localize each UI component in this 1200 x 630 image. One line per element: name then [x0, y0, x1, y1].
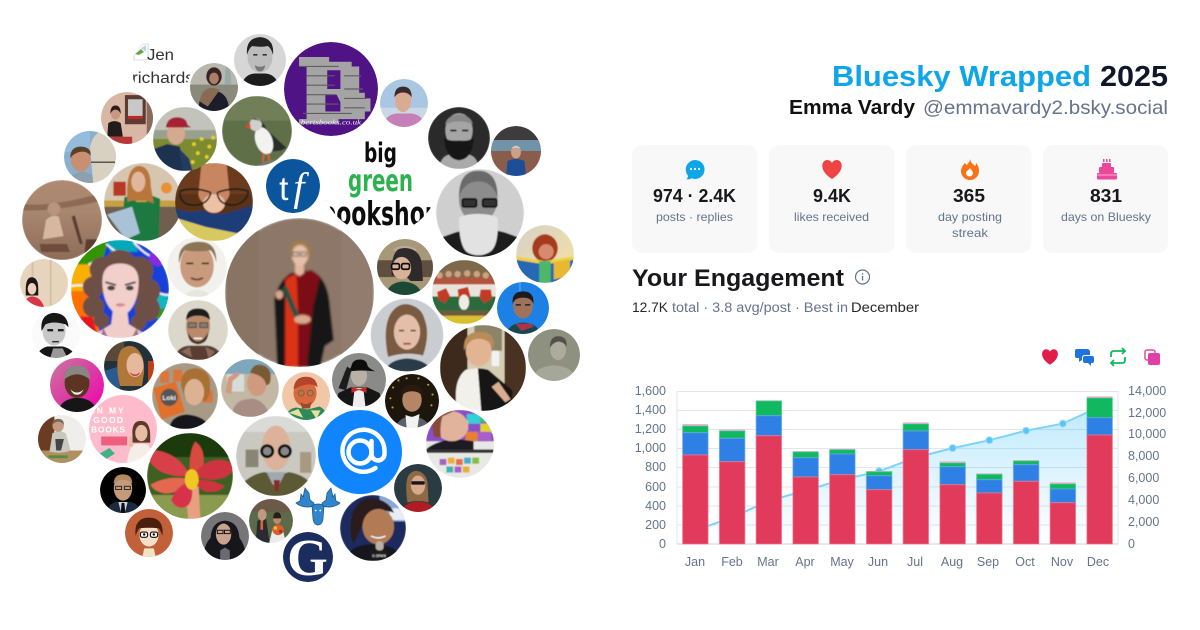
panel: days on Bluesky	[1043, 145, 1168, 253]
avatar: group with Welsh flags	[432, 260, 496, 324]
avatar: woman with colourful artwork	[426, 407, 494, 478]
month labels: Oct	[1015, 555, 1035, 569]
avatar cluster	[20, 34, 580, 587]
left axis labels: 0	[659, 537, 666, 551]
right axis labels: 14,000	[1128, 384, 1166, 398]
user name and handle: Emma Vardy	[789, 97, 916, 119]
panel: likes received: likes received	[794, 210, 869, 224]
avatar: grey portrait	[528, 329, 580, 381]
left axis labels	[635, 384, 666, 551]
avatar: big green bookshop logo: green	[348, 164, 413, 199]
avatar: red lily flower	[147, 433, 233, 519]
avatar: bearded man mono	[428, 107, 490, 169]
avatar: man at waterfront	[491, 126, 541, 176]
user name and handle: @emmavardy2.bsky.social	[923, 97, 1168, 119]
avatar: cartoon woman with glasses	[125, 509, 173, 557]
right axis labels: 10,000	[1128, 427, 1166, 441]
avatar: monochrome older man	[32, 310, 80, 358]
icon: legend quotes	[1145, 350, 1160, 365]
avatar: woman in green dress	[104, 163, 182, 241]
avatar: bald man round glasses	[236, 416, 316, 496]
month labels: Jan	[685, 555, 705, 569]
icon: info	[856, 270, 870, 284]
avatar: woman with sunglasses	[380, 79, 428, 127]
avatar: illustrated woman with curly hair	[71, 240, 169, 338]
avatar: broken image Jen richards	[133, 44, 190, 83]
right axis labels	[1128, 384, 1166, 551]
avatar: bertsbooks logo: bertsbooks.co.uk	[301, 119, 362, 127]
avatar: tf logo	[266, 159, 320, 213]
right axis labels: 8,000	[1128, 449, 1159, 463]
avatar: smiling woman on pink	[50, 358, 104, 412]
avatar: puffin	[222, 96, 292, 166]
avatar: woman with microphone	[340, 495, 406, 561]
avatar: man with gold dots	[385, 374, 439, 428]
engagement summary: December	[851, 299, 919, 315]
month labels: Aug	[941, 555, 963, 569]
avatar: woman with framed poster	[101, 92, 153, 144]
engagement summary: total · 3.8 avg/post · Best in	[672, 299, 848, 315]
avatar: big green bookshop logo	[320, 138, 440, 233]
avatar: In My Good Books	[89, 395, 157, 463]
panel: likes received	[769, 145, 894, 253]
left axis labels: 1,200	[635, 422, 666, 436]
avatar: young man profile	[221, 359, 279, 417]
title: Bluesky Wrapped	[832, 61, 1091, 93]
avatar: newspaper G logo: G	[287, 530, 328, 587]
avatar: sepia beach photo	[22, 180, 102, 260]
avatar: woman in red top	[394, 464, 442, 512]
panel: day posting streak: streak	[952, 226, 989, 240]
month labels: May	[830, 555, 855, 569]
avatar: bertsbooks logo	[284, 42, 378, 136]
avatar: woman with tiara	[377, 239, 433, 295]
month labels: Apr	[795, 555, 815, 569]
icon: chat bubble	[686, 160, 705, 179]
avatar: woman with orange books	[152, 363, 218, 429]
month labels: Dec	[1087, 555, 1109, 569]
right axis labels: 12,000	[1128, 406, 1166, 420]
bars: quotes	[683, 396, 1112, 484]
avatar: Emma Vardy main photo in graduation gown	[225, 218, 374, 367]
engagement summary	[632, 299, 919, 315]
left axis labels: 200	[645, 518, 666, 532]
bars: replies	[683, 416, 1112, 503]
left axis labels: 800	[645, 460, 666, 474]
avatar: moose logo	[296, 488, 340, 525]
left axis labels: 600	[645, 480, 666, 494]
month labels: Jul	[907, 555, 923, 569]
cumulative area and line	[695, 407, 1100, 544]
icon: legend likes	[1042, 349, 1058, 365]
avatar: man in dark suit	[100, 467, 146, 513]
avatar: woman reading book	[516, 225, 574, 283]
icon: flame	[961, 159, 979, 180]
icon: legend reposts	[1111, 348, 1125, 366]
avatar: woman with white horse	[64, 131, 116, 183]
right axis labels: 0	[1128, 537, 1135, 551]
avatar: woman with microphone: C-SPAN	[372, 554, 386, 558]
panel: posts and replies: 974 · 2.4K	[653, 186, 736, 206]
avatar: woman by skyline	[190, 63, 238, 111]
left axis labels: 400	[645, 499, 666, 513]
avatar: white bearded man	[436, 169, 524, 257]
right axis labels: 2,000	[1128, 515, 1159, 529]
avatar: smiling man with glasses	[168, 300, 228, 360]
avatar: wedding couple	[249, 499, 293, 543]
icon: birthday cake	[1097, 159, 1117, 180]
left axis labels: 1,000	[635, 441, 666, 455]
avatar: dark haired woman	[201, 512, 249, 560]
icon: heart	[822, 160, 842, 179]
icon: legend replies	[1075, 349, 1094, 366]
avatar: small portrait woman	[20, 259, 68, 307]
stacked bar and line chart	[635, 384, 1166, 569]
avatar: In My Good Books: BOOKS	[91, 424, 125, 434]
avatar: big green bookshop logo: big	[364, 138, 397, 169]
avatar: man top	[234, 34, 286, 86]
panel: posts and replies	[632, 145, 758, 253]
left axis labels: 1,400	[635, 403, 666, 417]
month labels: Feb	[721, 555, 743, 569]
avatar: woman with orange books: Loki	[162, 395, 176, 402]
title: 2025	[1100, 61, 1168, 93]
avatar: painted portrait of man	[282, 372, 330, 420]
avatar: woman mirror selfie	[440, 325, 526, 411]
panel: day posting streak: 365	[953, 186, 985, 206]
month labels: Nov	[1051, 555, 1074, 569]
month labels: Sep	[977, 555, 999, 569]
avatar: broken image Jen richards: richards	[132, 70, 194, 87]
user name and handle	[789, 97, 1168, 119]
panel: likes received: 9.4K	[813, 186, 851, 206]
panel: day posting streak: day posting	[938, 210, 1002, 224]
right axis labels: 6,000	[1128, 471, 1159, 485]
chart legend icons	[1042, 348, 1160, 366]
panel: day posting streak	[906, 145, 1032, 253]
bars: likes	[683, 435, 1112, 544]
avatar: big green bookshop logo: bookshop	[320, 194, 440, 233]
month labels: Jun	[868, 555, 888, 569]
avatar: man in red cap with daffodils	[153, 107, 217, 171]
avatar: woman in kitchen	[38, 415, 86, 463]
left axis labels: 1,600	[635, 384, 666, 398]
panel: days on Bluesky: days on Bluesky	[1061, 210, 1151, 224]
avatar: broken image Jen richards: Jen	[147, 47, 174, 64]
heading: Your Engagement: Your Engagement	[632, 265, 844, 292]
avatar: tf logo: f	[293, 165, 309, 210]
month labels	[685, 555, 1109, 569]
avatar: In My Good Books: IN MY	[92, 405, 124, 415]
avatar: woman long hair	[370, 298, 444, 372]
avatar: smiling curly woman	[104, 341, 154, 391]
avatar: glasses and blue scarf close up	[175, 163, 253, 241]
right axis labels: 4,000	[1128, 493, 1159, 507]
panel: posts and replies: posts · replies	[656, 210, 733, 224]
panel: days on Bluesky: 831	[1090, 186, 1122, 206]
avatar: man in hat with bow tie	[332, 353, 386, 407]
month labels: Mar	[757, 555, 779, 569]
bars: reposts	[683, 398, 1112, 489]
engagement summary: 12.7K	[632, 299, 669, 315]
avatar: In My Good Books: GOOD	[93, 415, 123, 425]
avatar: tf logo: t	[279, 171, 289, 208]
avatar: at sign logo	[318, 410, 402, 494]
avatar: woman on blue background	[497, 282, 549, 334]
avatar: close-up grey haired man	[167, 237, 227, 297]
